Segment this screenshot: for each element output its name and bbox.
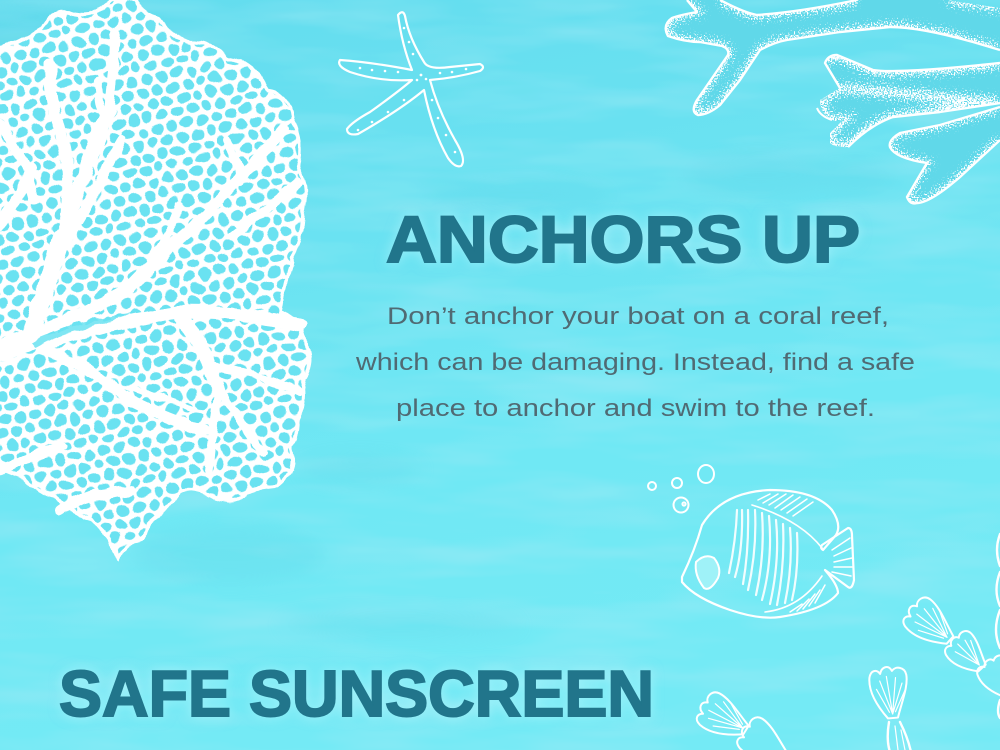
kelp strand right [898,593,1000,704]
coral branch 3 [890,107,1000,203]
branching coral, top right [666,0,1000,203]
bubbles [648,465,714,512]
body text: Don’t anchor your boat on a coral reef, [387,303,889,330]
fish [682,490,854,618]
body text: which can be damaging. Instead, find a safe [355,349,915,376]
coral branch 2 [817,55,1000,147]
fan branches [0,32,300,510]
heading: anchors up: ANCHORS UP [386,202,860,276]
kelp edge stems [996,534,1000,718]
fan trunk accent [30,312,135,348]
seaweed, bottom right [692,534,1000,750]
sea fan coral [0,0,308,558]
body text [355,303,915,422]
kelp strand left [692,688,796,750]
coral branch 1 [666,0,1000,115]
kelp strand centre [868,665,911,750]
heading: safe sunscreen: SAFE SUNSCREEN [59,657,654,730]
body text: place to anchor and swim to the reef. [396,395,875,422]
fan mesh [0,0,308,558]
starfish [339,12,483,166]
